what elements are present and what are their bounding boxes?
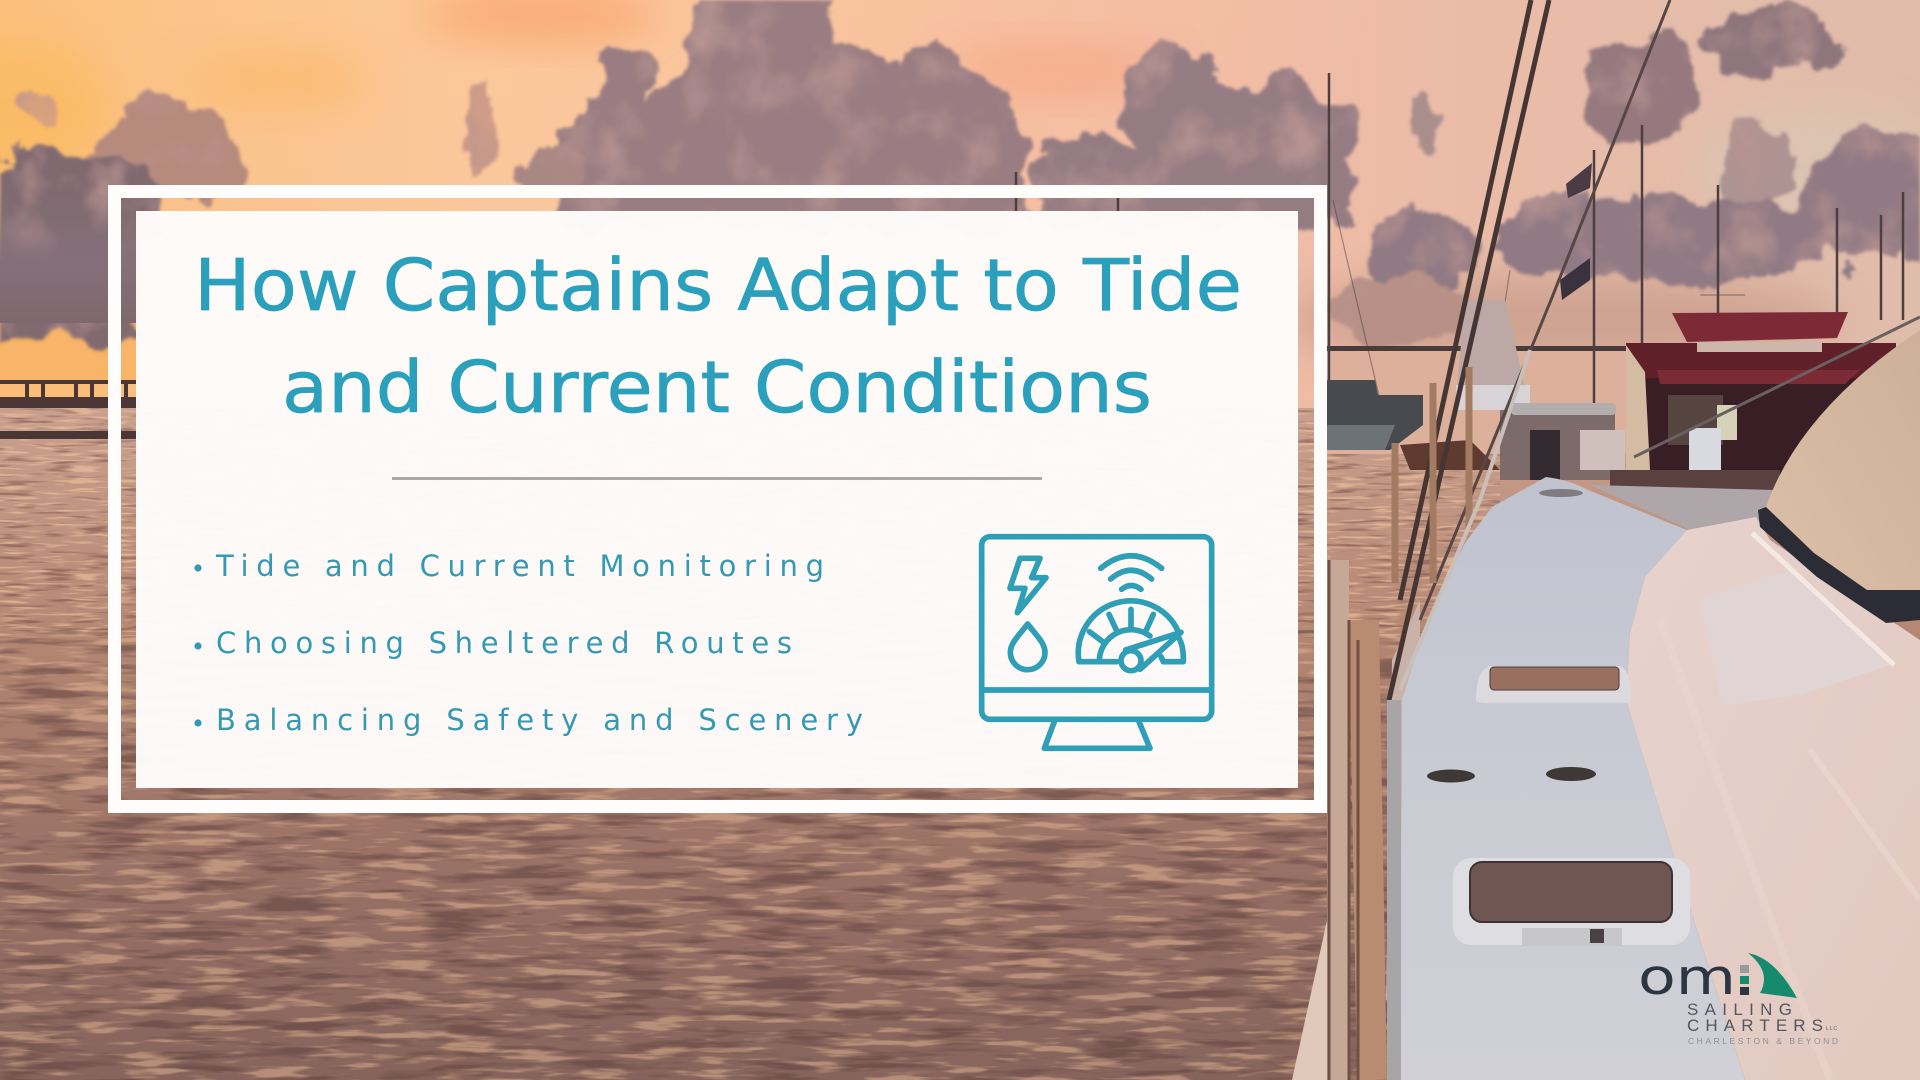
logo: om wordmark: om xyxy=(1638,949,1736,1006)
title: and Current Conditions xyxy=(282,346,1152,429)
icon: monitor with gauge xyxy=(982,537,1212,748)
panel: white frame xyxy=(114,192,1320,806)
cloud: left wisps xyxy=(20,82,494,194)
icon: bolt xyxy=(1010,558,1046,613)
background: sunset sky xyxy=(0,0,1920,420)
icon: wifi xyxy=(1101,556,1162,589)
boat: deck xyxy=(1398,477,1745,1080)
cloud: upper right xyxy=(1411,6,1837,142)
logo: sail xyxy=(1748,953,1797,998)
logo: tagline: CHARLESTON & BEYOND xyxy=(1688,1036,1838,1046)
logo: squares xyxy=(1740,965,1749,995)
flags xyxy=(1560,163,1592,300)
deck fittings xyxy=(1427,489,1596,782)
logo: charters: CHARTERS xyxy=(1687,1016,1823,1035)
cloud: central right xyxy=(1040,50,1357,225)
panel: content card xyxy=(136,211,1298,788)
boat rigging and rail xyxy=(1329,0,1920,1080)
cloud: lower right xyxy=(1330,125,1920,348)
cabin recessed deck xyxy=(1700,570,1890,705)
bullet list xyxy=(194,549,863,737)
title xyxy=(194,244,1242,429)
boat: hull side xyxy=(1292,600,1420,1080)
logo: llc: LLC xyxy=(1826,1026,1837,1032)
docked boats xyxy=(1326,300,1780,530)
hatch: upper xyxy=(1476,666,1631,703)
background: sea xyxy=(0,408,1920,1080)
divider xyxy=(392,477,1042,480)
marina building xyxy=(1626,312,1896,483)
cabin highlight strokes xyxy=(1660,533,1920,1080)
icon: gauge xyxy=(1078,601,1183,662)
cloud: central tower xyxy=(525,0,1030,230)
bullet list: Balancing Safety and Scenery xyxy=(216,703,863,737)
logo xyxy=(1638,949,1838,1046)
logo: sailing: SAILING xyxy=(1687,1000,1792,1019)
boat: canvas cover xyxy=(1758,330,1920,623)
title: How Captains Adapt to Tide xyxy=(194,244,1242,327)
cloud: left bank xyxy=(0,143,160,340)
bullet list: Tide and Current Monitoring xyxy=(215,549,824,583)
background: clouds xyxy=(0,0,1920,348)
background: masts and marina xyxy=(1016,73,1903,454)
bullet list: Choosing Sheltered Routes xyxy=(216,626,792,660)
far shore bridge xyxy=(0,346,1636,439)
hatch: lower xyxy=(1453,858,1690,946)
icon: drop xyxy=(1010,624,1045,670)
cloud: left bank flat base xyxy=(0,190,140,323)
boat: cabin top xyxy=(1626,517,1920,1080)
